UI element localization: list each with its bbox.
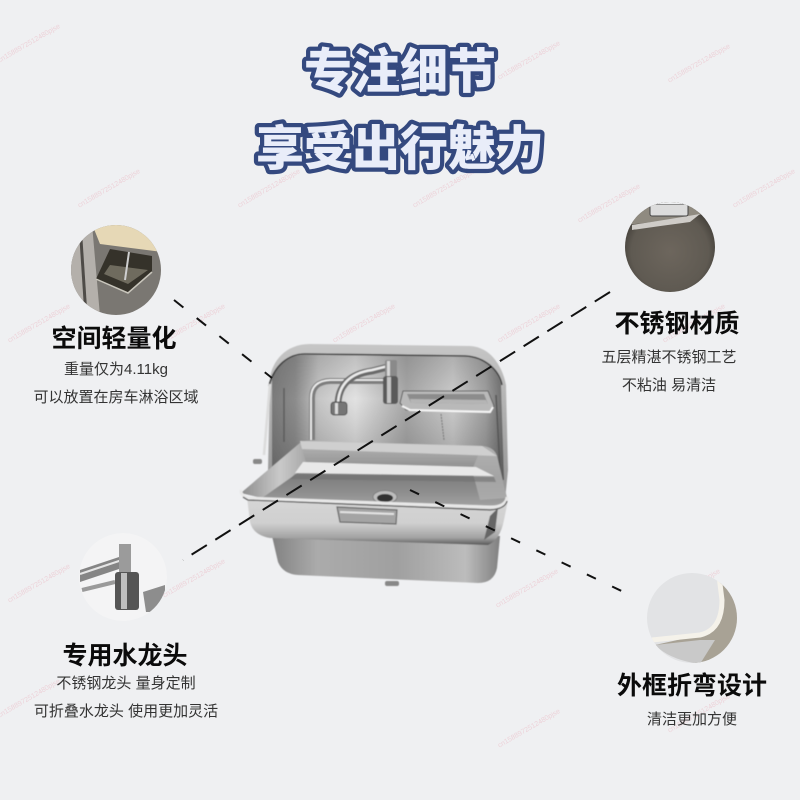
heading: 专用水龙头 [62,642,188,670]
sink illustration [241,344,508,586]
watermarks: cn1588972512480pjse [7,303,72,344]
watermarks: cn1588972512480pjse [497,708,562,749]
watermarks: cn1588972512480pjse [577,183,642,224]
watermarks: cn1588972512480pjse [667,43,732,84]
title: 专注细节 [304,46,496,99]
panel: folded outer frame [617,572,767,728]
title: 享受出行魅力 [256,123,544,176]
heading: 外框折弯设计 [617,672,767,700]
icon: sink in shower area photo [70,224,162,316]
watermarks: cn1588972512480pjse [732,168,797,209]
watermarks: cn1588972512480pjse [497,303,562,344]
watermarks: cn1588972512480pjse [662,303,727,344]
description [601,349,737,394]
watermarks: cn1588972512480pjse [497,40,562,81]
heading: 空间轻量化 [51,325,177,353]
heading: 不锈钢材质 [614,310,740,338]
watermarks: cn1588972512480pjse [237,168,302,209]
sink rim [241,490,507,507]
watermarks: cn1588972512480pjse [7,563,72,604]
panel: stainless steel [601,200,740,394]
sink back panel [264,344,508,500]
watermarks: cn1588972512480pjse [667,693,732,734]
panel: dedicated faucet [34,533,218,720]
watermarks: cn1588972512480pjse [332,303,397,344]
pipe and faucet [311,360,398,440]
panel: lightweight space [33,224,199,406]
watermarks: cn1588972512480pjse [77,168,142,209]
sink lower box [272,536,500,586]
title [256,46,544,176]
watermarks: cn1588972512480pjse [162,558,227,599]
icon: faucet photo [80,544,165,612]
knob [253,459,262,464]
description: 可以放置在房车淋浴区域 [33,389,199,406]
sink basin [241,441,507,506]
watermarks: cn1588972512480pjse [412,168,477,209]
description: 五层精湛不锈钢工艺 [601,349,737,366]
sink front face [247,497,508,545]
soap dish [400,391,494,440]
description [34,675,218,720]
description: 重量仅为4.11kg [64,361,168,378]
dashed leader: top right to bottom left [183,292,610,560]
description [33,361,199,406]
watermarks: cn1588972512480pjse [657,568,722,609]
dashed leader: top left to sink [174,300,272,378]
watermarks: cn1588972512480pjse [495,568,560,609]
description: 清洁更加方便 [647,711,737,728]
watermarks: cn1588972512480pjse [162,303,227,344]
icon: rim close-up photo [646,572,738,665]
dashed leader: drain to bottom right [410,490,632,596]
description: 不锈钢龙头 量身定制 [56,675,196,692]
icon: steel surface photo [625,202,715,292]
description: 可折叠水龙头 使用更加灵活 [34,703,218,720]
description: 不粘油 易清洁 [622,377,716,394]
